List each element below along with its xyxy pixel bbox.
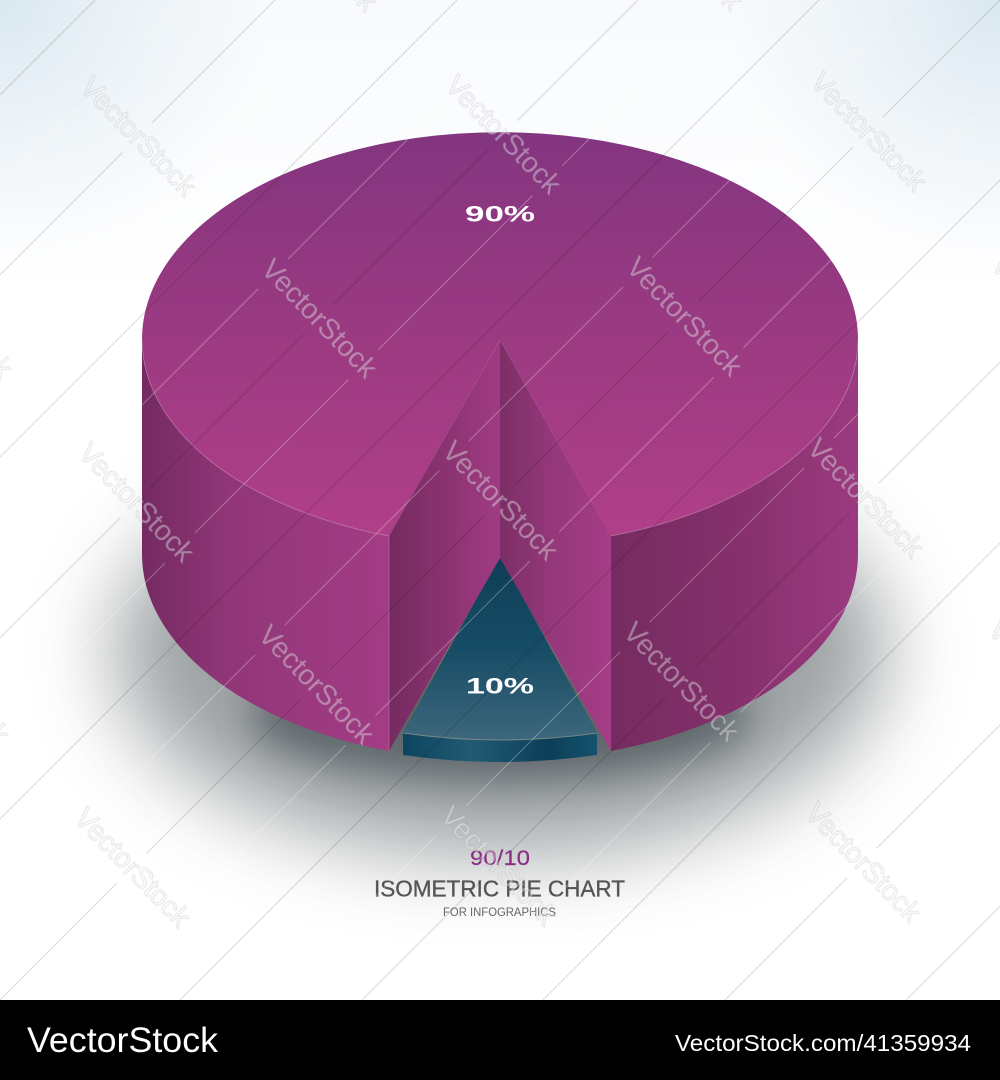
pie drop shadow — [115, 445, 885, 855]
90% slice — [142, 132, 858, 751]
watermark text: VectorStock — [252, 619, 381, 751]
watermark text: VectorStock — [799, 797, 928, 929]
outer wall right — [611, 340, 858, 751]
chart caption — [374, 847, 625, 919]
watermark text: VectorStock — [74, 71, 203, 203]
watermark text: VectorStock — [804, 66, 933, 198]
10% label: 10% — [466, 674, 534, 698]
watermark text: VectorStock — [439, 69, 568, 201]
10% slice rim highlight — [403, 733, 597, 740]
isometric pie chart — [142, 132, 858, 762]
notch wall left — [389, 340, 500, 751]
watermark text: VectorStock — [801, 432, 930, 564]
footer logo: VectorStock — [27, 1021, 219, 1060]
chart title: ISOMETRIC PIE CHART — [374, 876, 625, 902]
watermark text: VectorStock — [255, 253, 384, 385]
watermark text: VectorStock — [617, 616, 746, 748]
watermark text: VectorStock — [436, 435, 565, 567]
10% slice top — [403, 555, 597, 740]
watermark text: VectorStock — [68, 802, 197, 934]
subtitle: FOR INFOGRAPHICS — [443, 907, 556, 919]
10% slice side — [403, 733, 597, 762]
90% label: 90% — [465, 202, 535, 226]
outer wall left — [142, 340, 389, 751]
footer bar — [0, 1000, 1000, 1080]
top face — [142, 132, 858, 536]
watermark text: VectorStock — [620, 251, 749, 383]
10% slice — [403, 555, 597, 762]
footer url: VectorStock.com/41359934 — [675, 1030, 971, 1056]
notch wall right — [500, 340, 611, 751]
watermark text: VectorStock — [434, 800, 563, 932]
watermark text: VectorStock — [72, 437, 201, 569]
ratio label: 90/10 — [470, 847, 530, 870]
rim highlights — [142, 340, 858, 751]
